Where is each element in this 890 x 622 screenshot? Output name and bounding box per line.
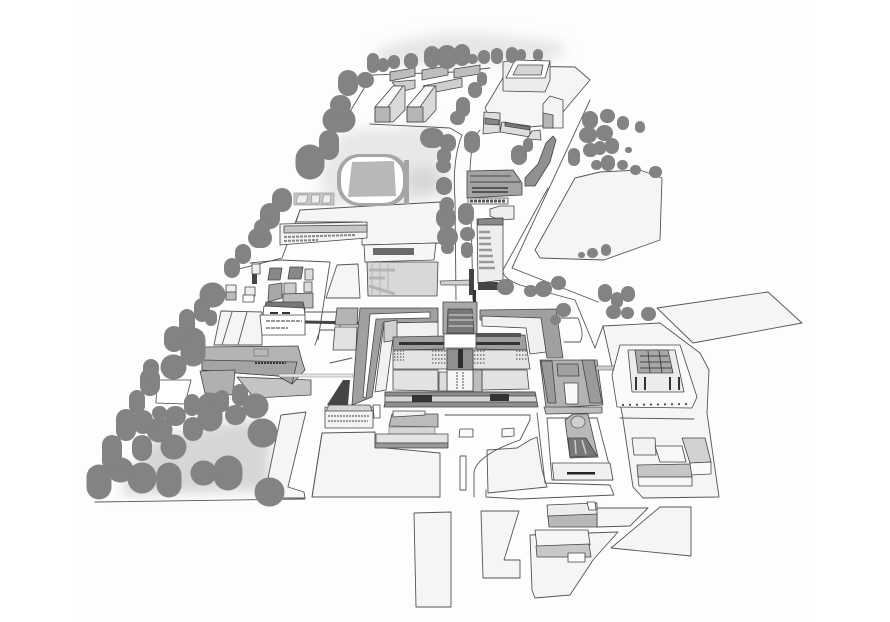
corridor between towers — [440, 269, 476, 312]
tennis courts — [294, 193, 334, 205]
central pillar — [447, 349, 473, 370]
north central block — [443, 302, 477, 334]
right ward courtyard — [473, 350, 530, 369]
residential blocks — [375, 65, 480, 122]
courtyard building and row houses — [483, 60, 563, 186]
main hospital complex — [327, 302, 563, 407]
south east service buildings — [632, 438, 711, 486]
north east wing — [480, 309, 563, 358]
south annex buildings — [535, 502, 597, 562]
long teaching block — [280, 222, 367, 245]
domed hall and plinth — [547, 414, 613, 480]
workshop building — [467, 170, 522, 220]
technical plant yard — [226, 264, 313, 308]
cross bar — [393, 336, 444, 350]
athletics track — [337, 154, 409, 206]
entrance buildings — [325, 405, 514, 448]
front bar — [385, 392, 537, 402]
left ward courtyard — [393, 350, 447, 369]
watercolour ground washes — [120, 33, 563, 495]
east wing complex — [540, 360, 623, 414]
eastern pavilion — [612, 345, 697, 408]
west building with terrace — [260, 302, 358, 335]
dark service wedge — [327, 380, 350, 405]
trees across the campus — [99, 52, 656, 492]
road outlines — [95, 68, 694, 502]
south west wing — [352, 308, 438, 405]
small annex beside corridor — [333, 308, 358, 350]
high-rise tower — [477, 218, 503, 290]
light ground parcels — [214, 66, 802, 607]
science building — [364, 243, 438, 296]
large west building — [156, 346, 353, 404]
central west wing — [375, 322, 438, 392]
